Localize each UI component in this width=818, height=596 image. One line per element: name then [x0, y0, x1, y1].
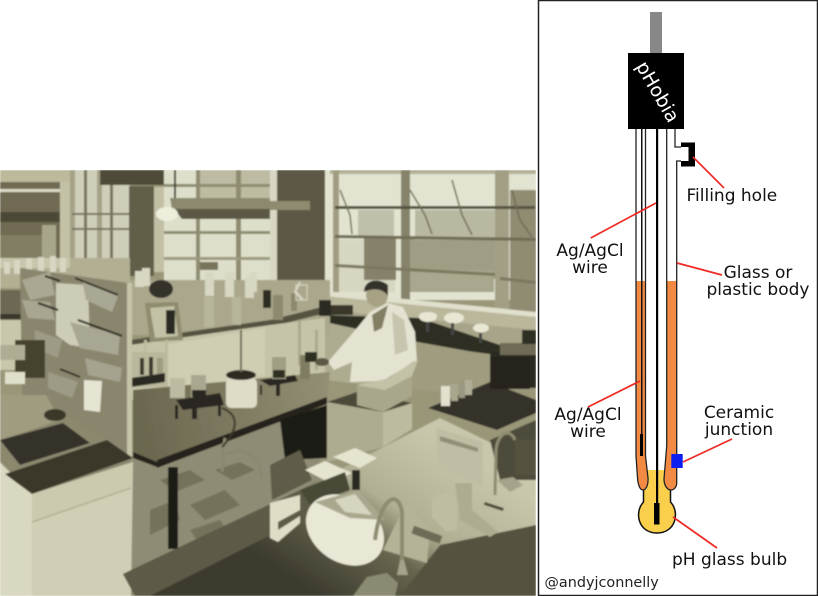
- black cap with brand: pHobia: [631, 58, 684, 126]
- instrument on stand: [432, 430, 523, 538]
- bulb outline: [639, 487, 675, 533]
- reference electrode tip: [640, 434, 643, 456]
- scale with two white pans: [300, 448, 377, 505]
- tube walls: [636, 129, 681, 490]
- yellow inner solution and glass bulb: [639, 470, 675, 533]
- label: ceramic junction: junction: [704, 420, 773, 440]
- scientist in white lab coat: [315, 281, 418, 390]
- orange reference electrolyte: [636, 281, 677, 490]
- panel border: [538, 0, 818, 596]
- callout lines: [588, 157, 732, 548]
- central electrode tip: [654, 503, 660, 524]
- ceramic junction block: [671, 454, 683, 468]
- left floor mat and sink: [0, 395, 90, 465]
- label: lower Ag/AgCl wire: wire: [570, 422, 606, 442]
- big glass jar: [304, 492, 385, 567]
- front lab bench: [123, 418, 536, 596]
- label: glass or plastic body: Glass or: [724, 263, 792, 283]
- windows right with brick building outside: [270, 170, 536, 330]
- label: upper Ag/AgCl wire: wire: [572, 258, 608, 278]
- small right table with jars: [428, 380, 536, 430]
- crock, burners and beakers: [170, 330, 317, 419]
- label: upper Ag/AgCl wire: Ag/AgCl: [556, 241, 624, 261]
- credit: @andyjconnelly: [544, 575, 659, 591]
- white pedestal with box: [327, 360, 418, 462]
- overhead lamp: [156, 170, 270, 221]
- label: ceramic junction: Ceramic: [704, 403, 774, 423]
- label: filling hole: Filling hole: [686, 186, 777, 206]
- central lab table: [133, 372, 330, 549]
- steel tray, faucet and small sink: [353, 499, 442, 596]
- label: glass or plastic body: plastic body: [707, 280, 809, 300]
- panel: pH electrode diagram: [538, 0, 818, 596]
- floor: [0, 416, 133, 596]
- label: pH glass bulb: pH glass bulb: [672, 550, 787, 570]
- label: lower Ag/AgCl wire: Ag/AgCl: [554, 405, 622, 425]
- white box: [270, 495, 300, 542]
- icon: filling hole cap: [681, 142, 695, 166]
- back wall and windows left: [0, 170, 270, 285]
- back bench with glassware: [0, 256, 331, 400]
- electrode shaft with fill: [636, 129, 681, 533]
- reference wire: [641, 129, 642, 434]
- photo: vintage chemistry laboratory with a man in a lab coat: [0, 170, 536, 596]
- rod: [650, 12, 662, 53]
- left pedestal cabinet: [0, 440, 133, 596]
- central silver wire: [656, 129, 658, 504]
- back bench along the windows: [320, 305, 536, 395]
- large wall of glass bottles on a rack panel: [0, 268, 132, 458]
